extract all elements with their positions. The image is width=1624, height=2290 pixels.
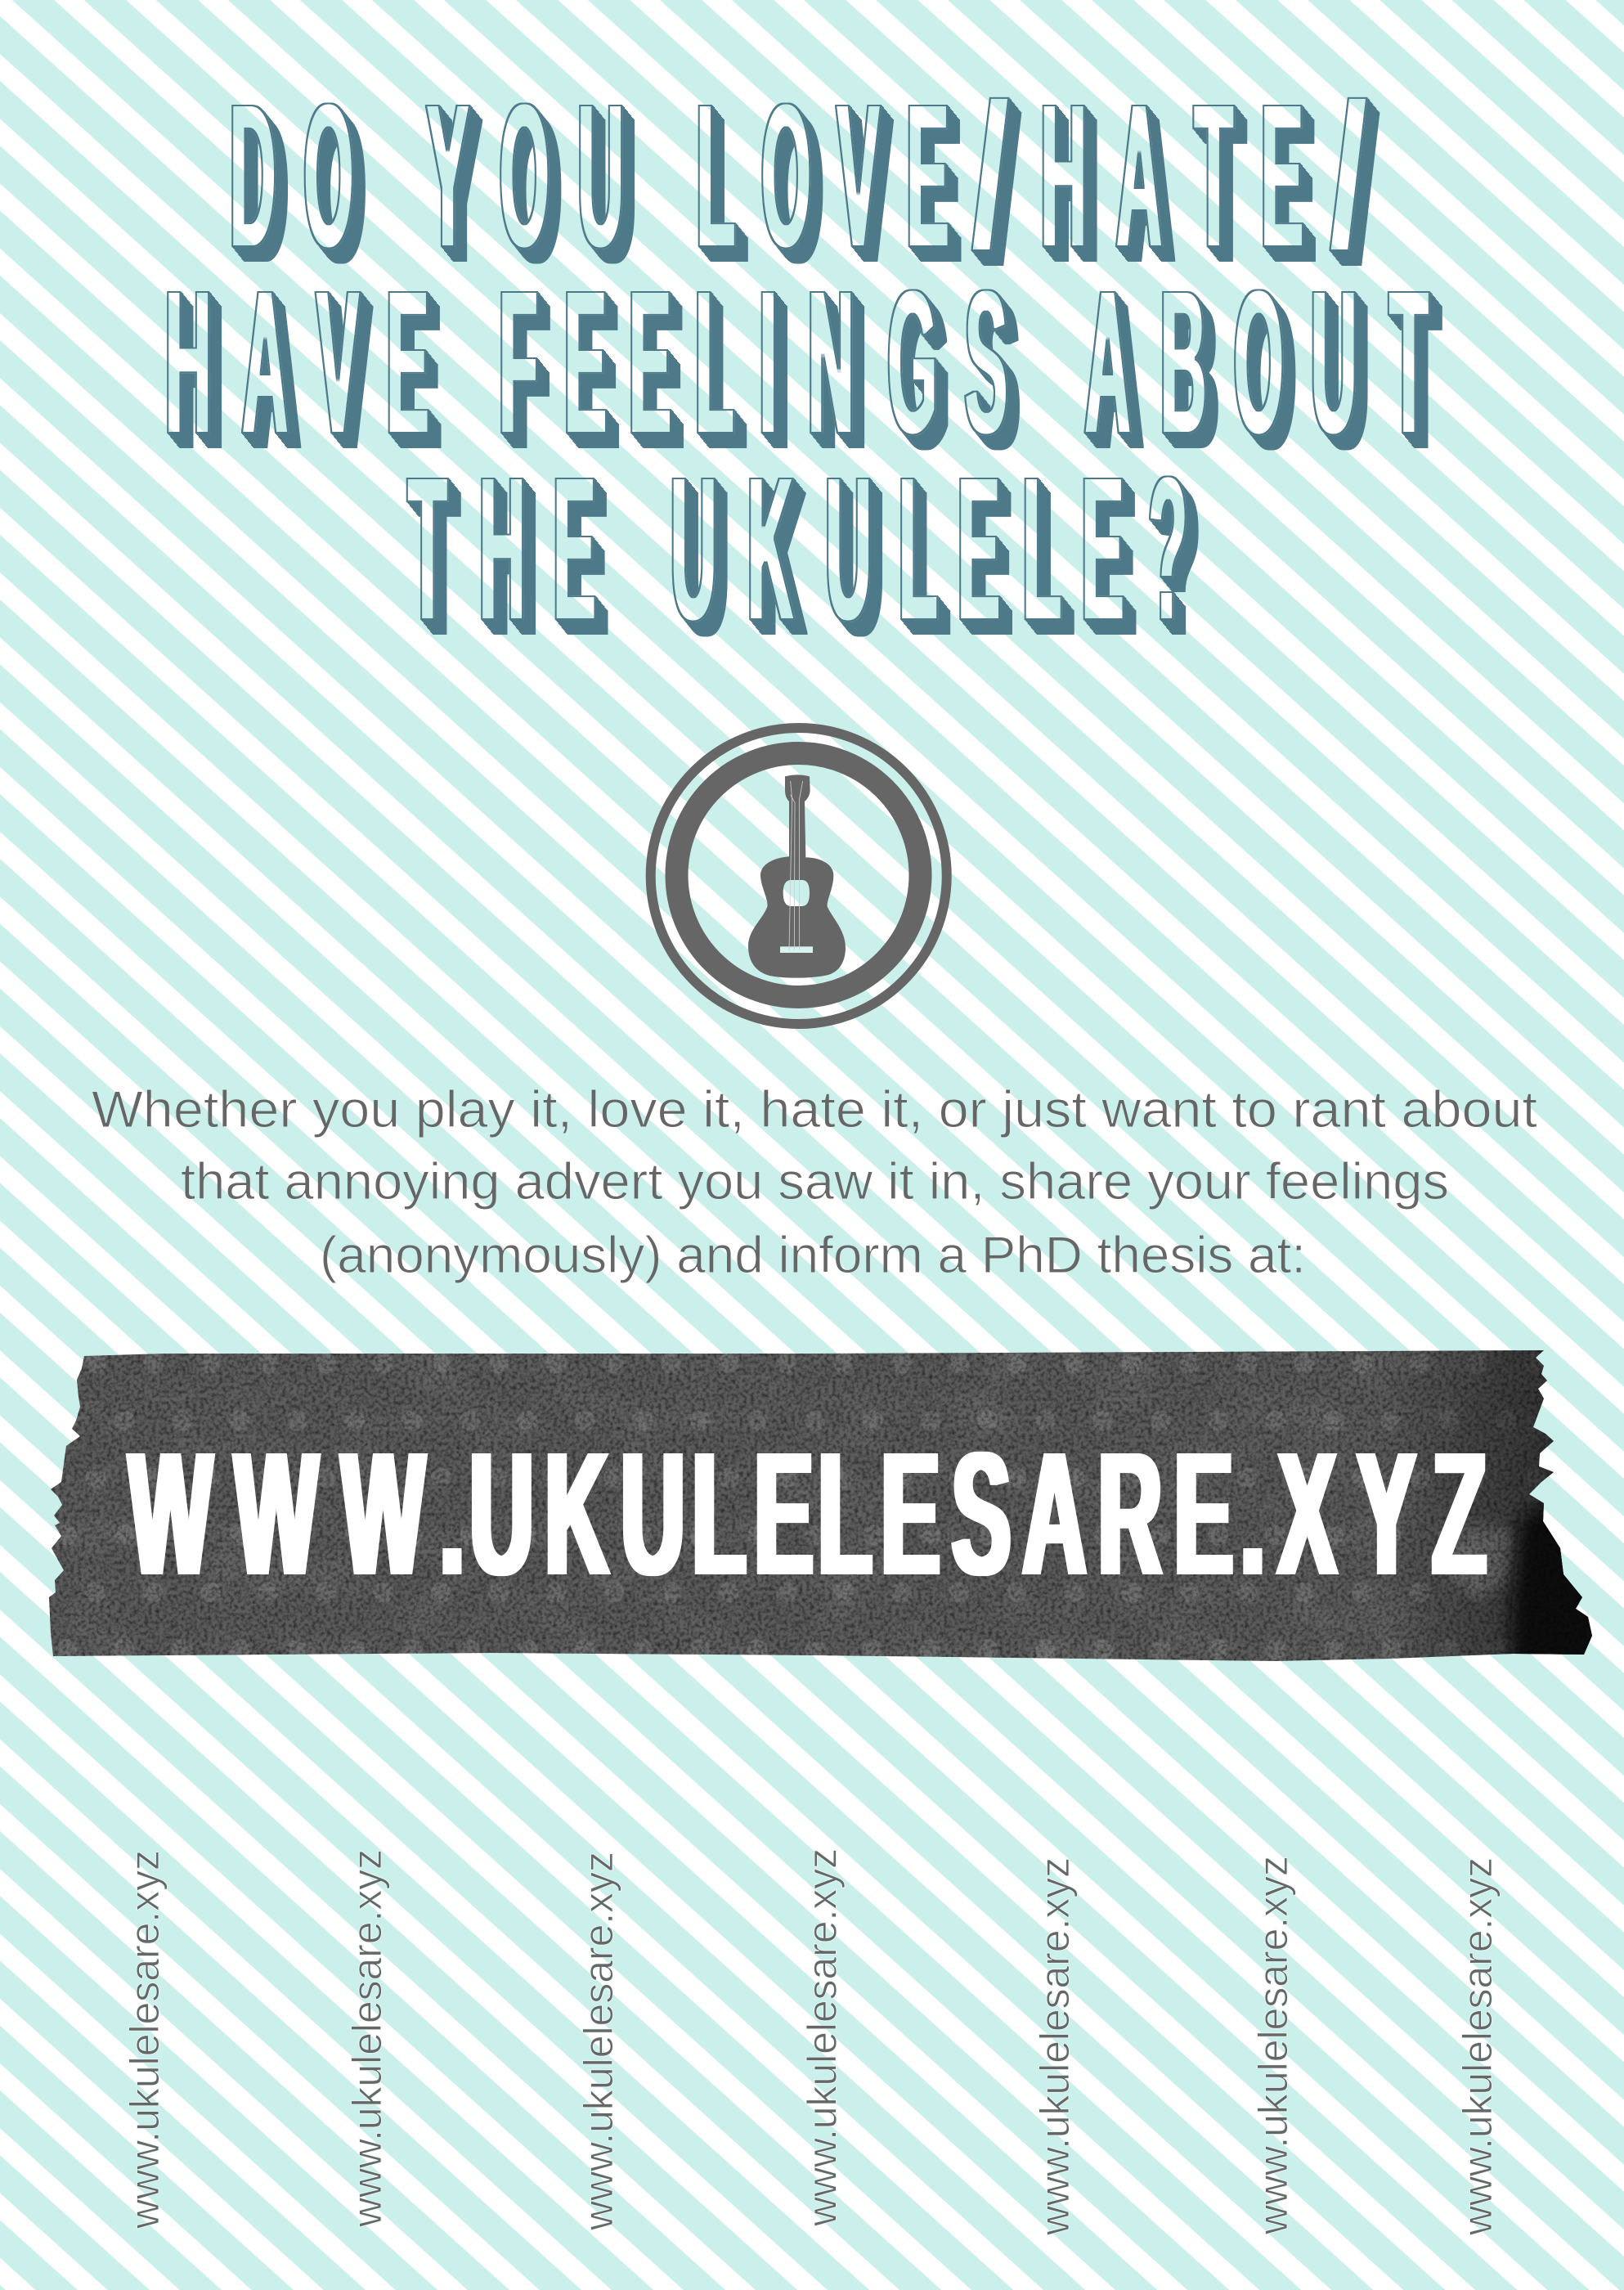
tear-off tabs bbox=[122, 1848, 1501, 2236]
icon: ukulele badge bbox=[651, 728, 947, 1024]
tab 2: www.ukulelesare.xyz bbox=[344, 1849, 390, 2228]
icon: ukulele bbox=[748, 775, 846, 978]
title bbox=[165, 62, 1429, 663]
inner ring bbox=[677, 753, 921, 997]
tab 3: www.ukulelesare.xyz bbox=[576, 1852, 621, 2231]
title line 3: THE UKULELE? bbox=[408, 435, 1187, 663]
title slash 2: / bbox=[1330, 62, 1366, 290]
paragraph line 3: (anonymously) and inform a PhD thesis at: bbox=[320, 1227, 1306, 1284]
title line 2: HAVE FEELINGS ABOUT bbox=[165, 249, 1429, 477]
intro paragraph bbox=[92, 1081, 1538, 1284]
tab 1: www.ukulelesare.xyz bbox=[122, 1850, 168, 2229]
title slash 1: / bbox=[972, 62, 1008, 290]
tab 5: www.ukulelesare.xyz bbox=[1032, 1857, 1078, 2236]
title line 1 continued: HATE bbox=[1040, 62, 1303, 290]
banner url: WWW.UKULELESARE.XYZ bbox=[128, 1417, 1487, 1613]
tab 7: www.ukulelesare.xyz bbox=[1455, 1857, 1501, 2236]
outer ring bbox=[651, 728, 947, 1024]
tape body bbox=[49, 1350, 1592, 1661]
title line 1: DO YOU LOVE bbox=[230, 62, 949, 290]
paragraph line 1: Whether you play it, love it, hate it, or just want to rant about bbox=[92, 1081, 1538, 1138]
washi tape banner bbox=[49, 1350, 1592, 1661]
tab 4: www.ukulelesare.xyz bbox=[800, 1848, 846, 2227]
paragraph line 2: that annoying advert you saw it in, share your feelings bbox=[181, 1153, 1449, 1210]
tab 6: www.ukulelesare.xyz bbox=[1250, 1856, 1296, 2235]
